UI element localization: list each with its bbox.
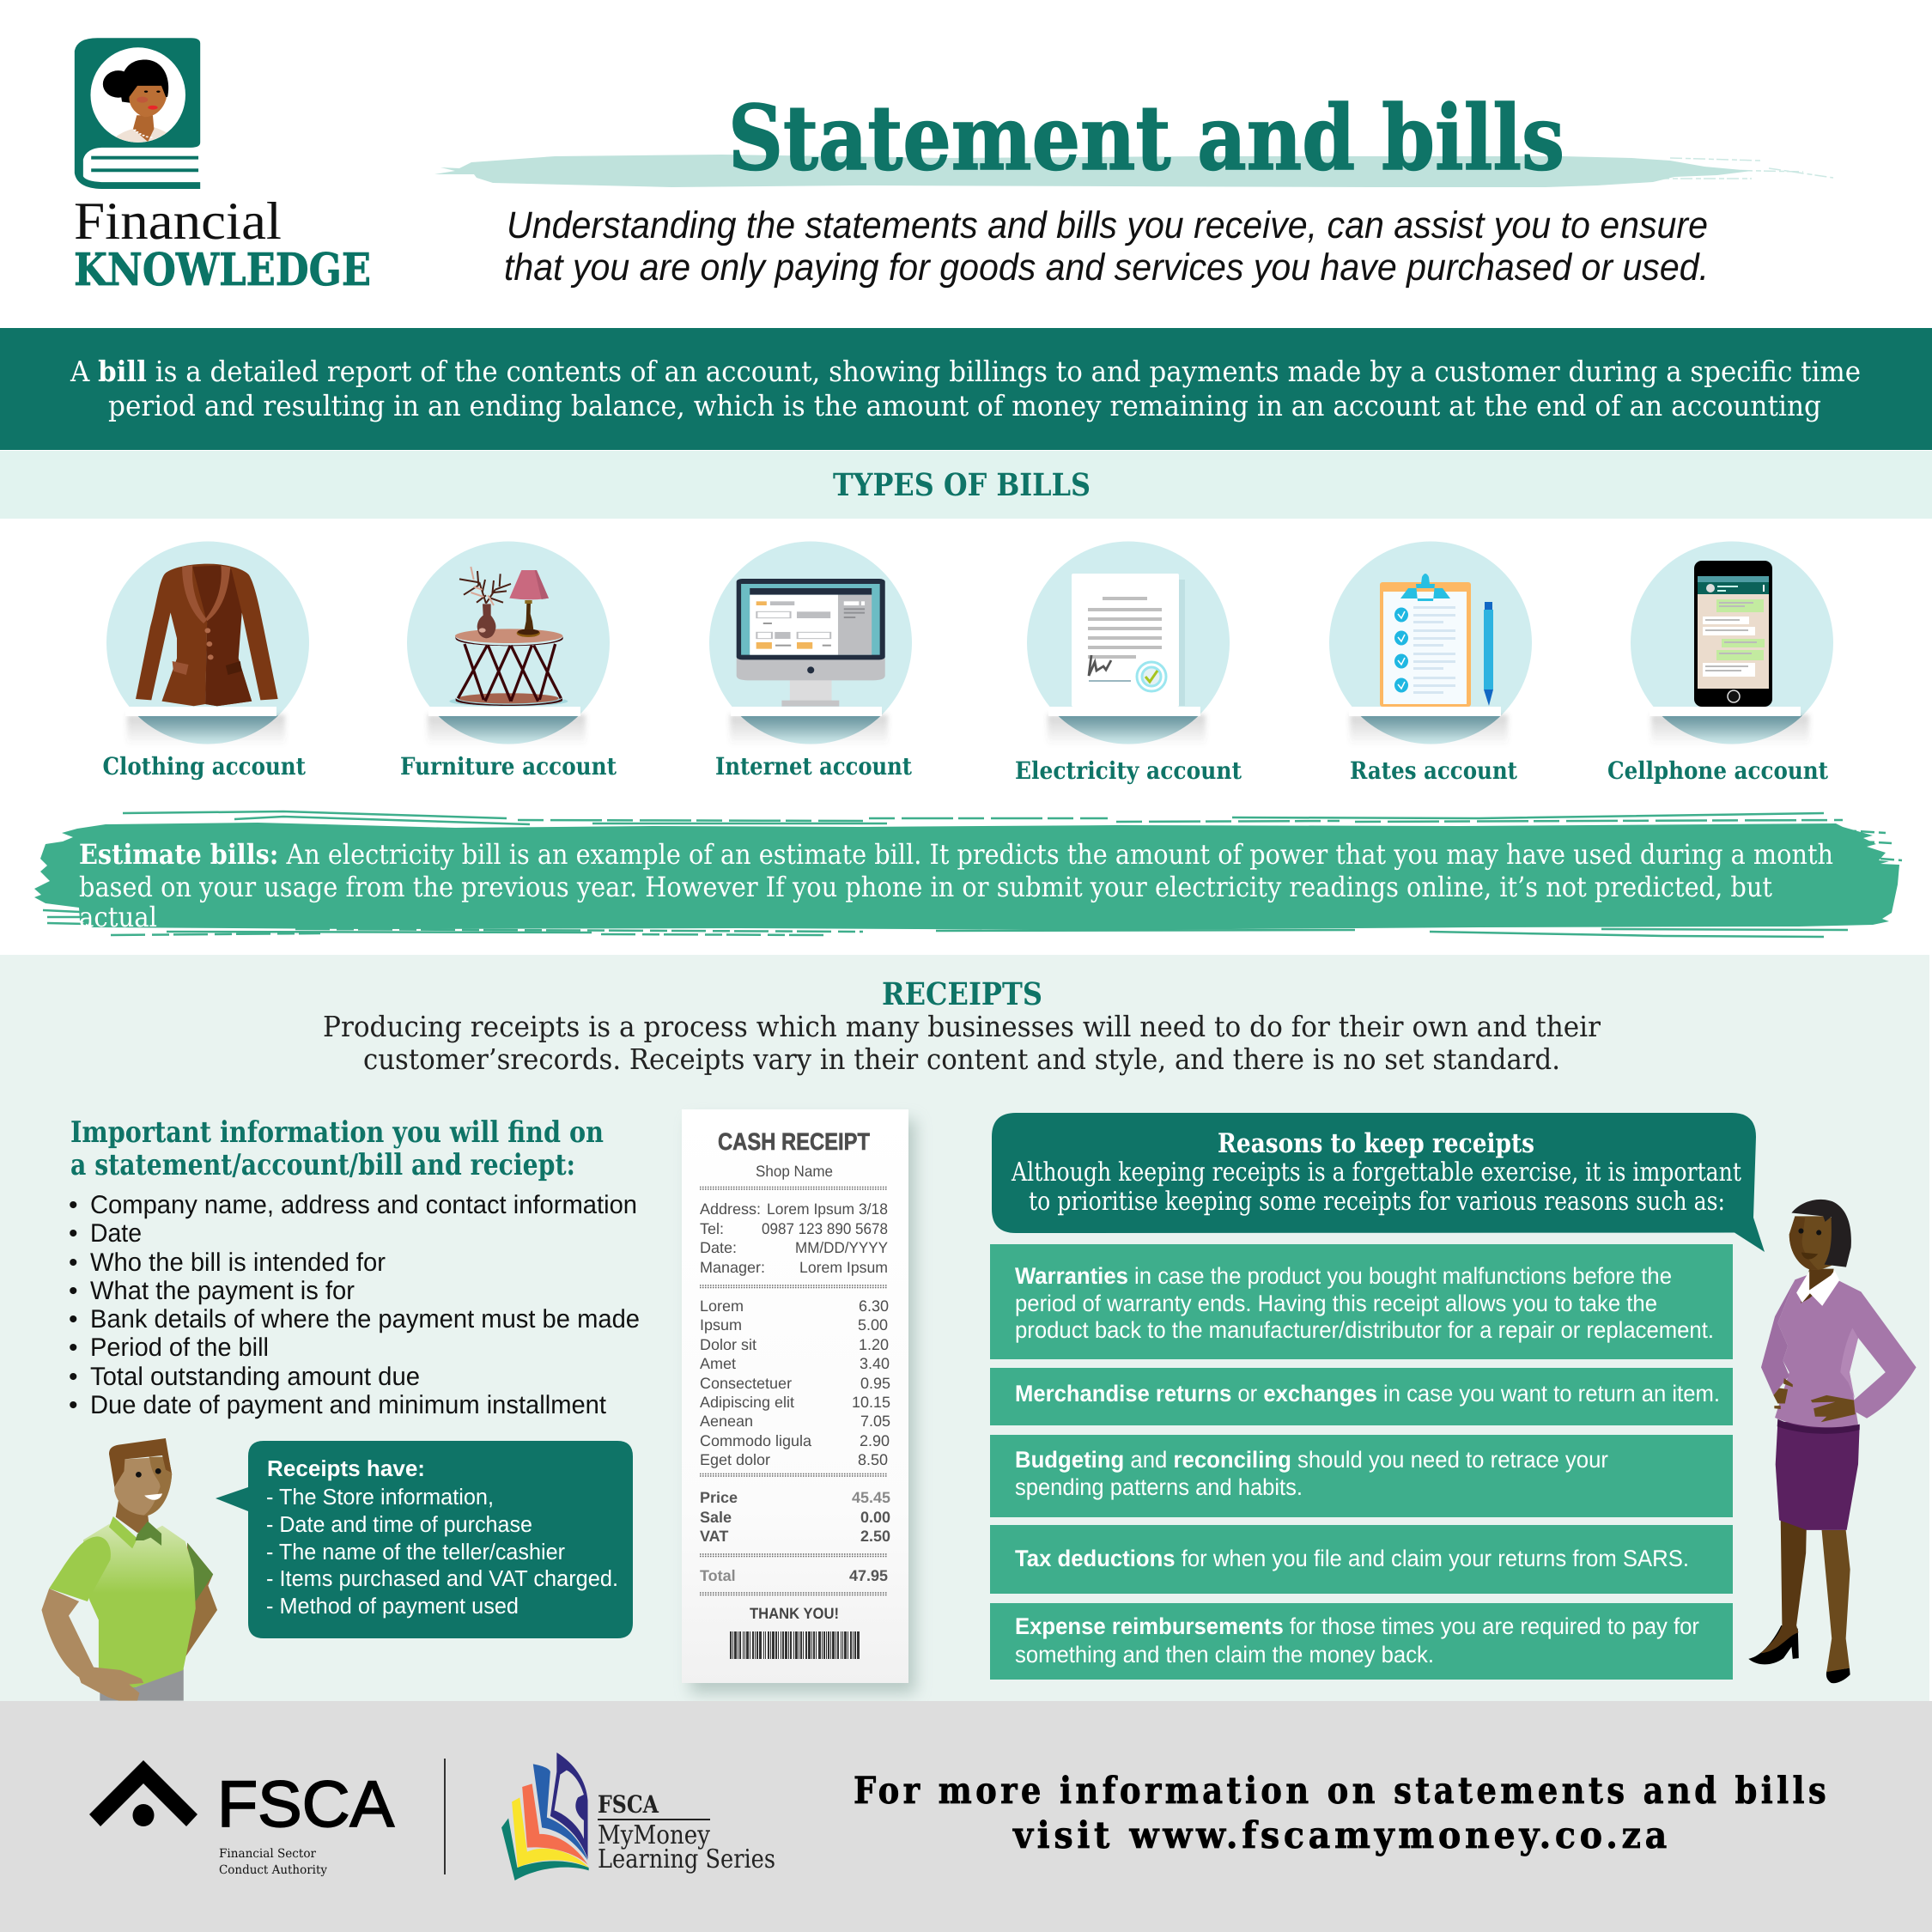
receipt illustration: Commodo ligula	[700, 1432, 812, 1449]
subtitle: Understanding the statements and bills you receive, can assist you to ensure	[507, 204, 1708, 246]
reason: warranties	[990, 1244, 1733, 1359]
callout: receipts have: - Date and time of purchase	[266, 1511, 532, 1537]
reason: warranties: Warranties in case the product you bought malfunctions before the	[1015, 1263, 1672, 1289]
receipt illustration: 2.50	[860, 1528, 890, 1545]
reason: budgeting: Budgeting and reconciling should you need to retrace your	[1015, 1447, 1608, 1473]
brush stroke background	[34, 811, 1902, 937]
illustration: woman in purple	[1748, 1200, 1917, 1683]
logo word: Financial: Financial	[74, 192, 282, 251]
receipt illustration	[682, 1109, 915, 1693]
logo: MyMoney Learning Series book	[501, 1753, 775, 1880]
callout: estimate bills: actual	[79, 901, 157, 933]
receipt illustration: Manager:	[700, 1259, 765, 1276]
panel: clothing account	[103, 541, 309, 781]
receipt illustration: 47.95	[849, 1567, 888, 1584]
bullet list: important information: Company name, address and contact information	[90, 1191, 637, 1219]
label: Internet account	[715, 752, 912, 781]
receipt illustration: Lorem Ipsum	[799, 1259, 888, 1276]
bullet list: important information: Who the bill is intended for	[90, 1249, 386, 1277]
receipt illustration: Adipiscing elit	[700, 1394, 794, 1411]
receipt illustration: 7.05	[860, 1413, 890, 1430]
heading: important information: Important information you will find on	[70, 1115, 604, 1150]
banner: definition of a bill: period and resulting in an ending balance, which is the amount of money remaining in an account at the end of an accounting	[108, 389, 1821, 422]
receipt illustration: 0.00	[860, 1509, 890, 1526]
label: Cellphone account	[1607, 756, 1828, 785]
receipt illustration: 8.50	[858, 1451, 888, 1468]
bullet list: important information: •	[69, 1219, 78, 1248]
bullet list: important information: •	[69, 1249, 78, 1277]
section heading: types of bills: TYPES OF BILLS	[833, 467, 1091, 503]
logo: FSCA	[89, 1760, 394, 1877]
heading: important information	[70, 1115, 604, 1182]
receipt illustration: Dolor sit	[700, 1336, 756, 1353]
footer call to action	[854, 1770, 1830, 1857]
banner: definition of a bill	[0, 328, 1932, 450]
speech bubble: reasons to keep receipts: to prioritise keeping some receipts for various reasons such as:	[1029, 1187, 1725, 1217]
bullet list: important information: •	[69, 1363, 78, 1391]
barcode	[730, 1631, 860, 1659]
logo: MyMoney Learning Series book: Learning Series	[598, 1844, 775, 1874]
reason: tax deductions	[990, 1525, 1733, 1594]
receipt illustration: Sale	[700, 1509, 732, 1526]
icon: signed document	[1072, 574, 1185, 707]
receipt illustration: Shop Name	[756, 1163, 833, 1180]
brush stroke behind title	[434, 155, 1833, 187]
receipt illustration: 2.90	[860, 1432, 890, 1449]
receipt illustration: Date:	[700, 1239, 737, 1256]
section heading: types of bills	[0, 451, 1932, 519]
speech bubble: reasons to keep receipts: Reasons to keep receipts	[1218, 1128, 1534, 1159]
receipt illustration: Amet	[700, 1355, 736, 1372]
receipts intro text: customer’srecords. Receipts vary in their content and style, and there is no set standard.	[363, 1042, 1560, 1076]
reason: budgeting	[990, 1435, 1733, 1517]
icon: smartphone	[1694, 561, 1772, 707]
icon: desktop monitor	[737, 579, 885, 707]
callout: receipts have: - The Store information,	[266, 1484, 494, 1510]
reason: expense reimbursements: something and then claim the money back.	[1015, 1642, 1434, 1668]
logo: MyMoney Learning Series book: MyMoney	[598, 1820, 710, 1850]
receipt illustration: CASH RECEIPT	[718, 1128, 870, 1155]
reason: merchandise returns	[990, 1368, 1733, 1425]
receipt illustration: 45.45	[852, 1489, 890, 1506]
receipt illustration: 0.95	[860, 1375, 890, 1392]
receipt illustration: VAT	[700, 1528, 728, 1545]
panel: rates account	[1329, 541, 1532, 785]
bullet list: important information: Total outstanding amount due	[90, 1363, 420, 1391]
reason: expense reimbursements	[990, 1603, 1733, 1680]
banner: definition of a bill: A bill is a detailed report of the contents of an account, showing billings to and payments made by a customer during a specific time	[70, 355, 1861, 388]
title: Statement and bills	[728, 85, 1564, 191]
label: Furniture account	[400, 752, 617, 781]
bullet list: important information: What the payment is for	[90, 1277, 355, 1305]
illustration: man in green shirt	[41, 1438, 217, 1701]
receipt illustration: Consectetuer	[700, 1375, 792, 1392]
logo word: KNOWLEDGE: KNOWLEDGE	[74, 244, 371, 296]
receipt illustration: THANK YOU!	[750, 1605, 839, 1622]
panel: furniture account	[400, 541, 617, 781]
speech bubble: reasons to keep receipts	[992, 1113, 1765, 1252]
receipt illustration: 0987 123 890 5678	[762, 1220, 888, 1237]
receipt illustration: Eget dolor	[700, 1451, 770, 1468]
receipt illustration: Lorem	[700, 1297, 744, 1315]
logo: FSCA: Conduct Authority	[219, 1863, 327, 1877]
callout: estimate bills: based on your usage from the previous year. However If you phone in or submit your electricity readings online, it’s not predicted, but	[79, 871, 1772, 903]
heading: receipts: RECEIPTS	[882, 976, 1042, 1012]
reason: budgeting: spending patterns and habits.	[1015, 1474, 1303, 1500]
icon: book with portrait	[75, 38, 200, 189]
receipt illustration: Ipsum	[700, 1316, 742, 1334]
panel: electricity account	[1015, 541, 1242, 785]
label: Clothing account	[103, 752, 306, 781]
icon: clipboard and pen	[1380, 574, 1493, 707]
bullet list: important information: •	[69, 1391, 78, 1419]
callout: estimate bills	[34, 811, 1902, 937]
heading: important information: a statement/account/bill and reciept:	[70, 1148, 575, 1182]
receipts intro text: Producing receipts is a process which many businesses will need to do for their own and their	[323, 1010, 1601, 1043]
callout: receipts have: - The name of the teller/cashier	[266, 1539, 565, 1564]
reason: merchandise returns: Merchandise returns or exchanges in case you want to return an item.	[1015, 1381, 1720, 1406]
panel: footer	[0, 1701, 1932, 1932]
footer call to action: visit www.fscamymoney.co.za	[1012, 1814, 1671, 1857]
receipt illustration: 1.20	[859, 1336, 889, 1353]
receipt illustration: Total	[700, 1567, 736, 1584]
logo: Financial Knowledge	[74, 38, 371, 296]
receipt illustration: Aenean	[700, 1413, 753, 1430]
receipt illustration: Tel:	[700, 1220, 724, 1237]
subtitle: that you are only paying for goods and services you have purchased or used.	[504, 246, 1709, 289]
icon: jacket	[136, 564, 278, 706]
bullet list: important information: •	[69, 1191, 78, 1219]
logo: MyMoney Learning Series book: FSCA	[598, 1790, 659, 1819]
bullet list: important information: Bank details of where the payment must be made	[90, 1305, 640, 1334]
subtitle	[504, 204, 1709, 289]
bullet list: important information: Period of the bill	[90, 1334, 269, 1362]
receipt illustration: Lorem Ipsum 3/18	[767, 1200, 888, 1218]
reason: warranties: period of warranty ends. Having this receipt allows you to take the	[1015, 1291, 1657, 1316]
callout: receipts have	[216, 1441, 633, 1638]
bullet list: important information: Date	[90, 1219, 142, 1248]
speech bubble: reasons to keep receipts: Although keeping receipts is a forgettable exercise, it is important	[1011, 1157, 1741, 1188]
bullet list: important information: •	[69, 1305, 78, 1334]
panel: internet account	[709, 541, 912, 781]
reason: warranties: product back to the manufacturer/distributor for a repair or replacement.	[1015, 1317, 1714, 1343]
bullet list: important information: •	[69, 1334, 78, 1362]
logo: FSCA: FSCA	[217, 1768, 394, 1841]
callout: receipts have: - Items purchased and VAT charged.	[266, 1565, 618, 1591]
bullet list: important information: Due date of payment and minimum installment	[90, 1391, 607, 1419]
receipt illustration: Address:	[700, 1200, 761, 1218]
receipts intro text	[323, 1010, 1601, 1076]
reason: expense reimbursements: Expense reimbursements for those times you are required to pay for	[1015, 1613, 1699, 1639]
bullet list: important information: •	[69, 1277, 78, 1305]
logo: FSCA: Financial Sector	[219, 1847, 316, 1861]
receipt illustration: 5.00	[858, 1316, 888, 1334]
receipt illustration: 10.15	[852, 1394, 890, 1411]
bullet list: important information	[69, 1191, 640, 1419]
receipt illustration: Price	[700, 1489, 738, 1506]
panel: cellphone account	[1607, 541, 1833, 785]
callout: receipts have: Receipts have:	[267, 1455, 425, 1481]
label: Electricity account	[1015, 756, 1242, 785]
label: Rates account	[1350, 756, 1517, 785]
panel: receipts background	[0, 955, 1929, 1702]
reason: tax deductions: Tax deductions for when you file and claim your returns from SARS.	[1015, 1546, 1689, 1571]
receipt illustration: 3.40	[860, 1355, 890, 1372]
callout: receipts have: - Method of payment used	[266, 1593, 519, 1619]
receipt illustration: 6.30	[859, 1297, 889, 1315]
receipt illustration: MM/DD/YYYY	[795, 1239, 888, 1256]
icon: table with vase and lamp	[449, 567, 568, 707]
